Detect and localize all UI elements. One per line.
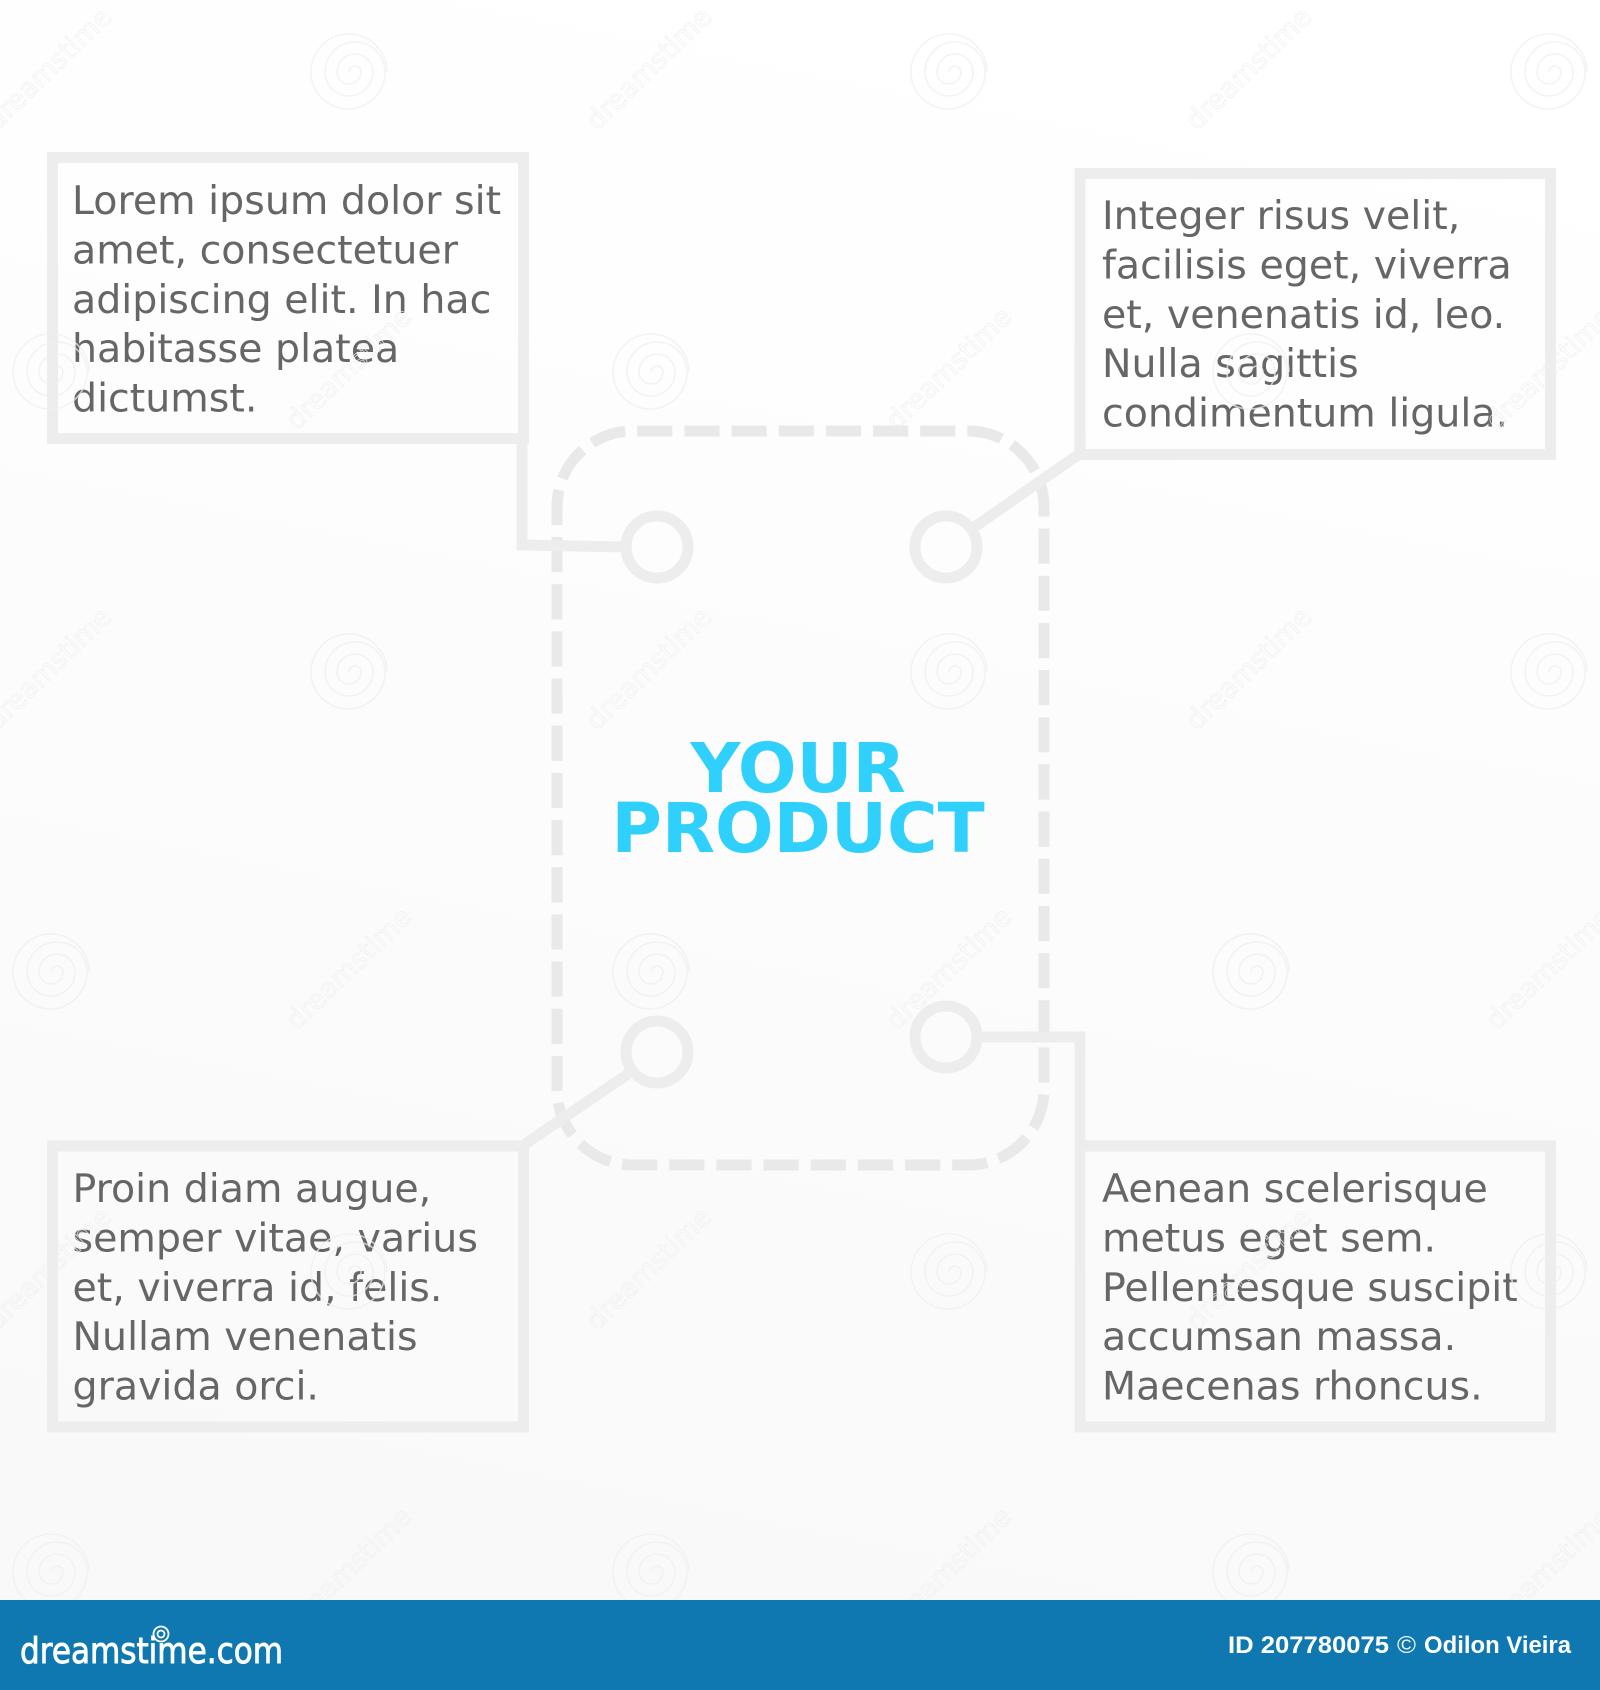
text: bottom right: Aenean scelerisque — [1102, 1166, 1488, 1212]
node: top left circle — [626, 516, 688, 578]
footer bar — [0, 1600, 1600, 1690]
connector: top right — [973, 455, 1078, 528]
text: bottom right: Pellentesque suscipit — [1102, 1265, 1518, 1311]
panel: bottom left text box — [52, 1146, 524, 1427]
node: top right circle — [915, 516, 977, 578]
watermark pattern: dreamstime — [880, 901, 1018, 1036]
watermark pattern: dreamstime — [1180, 601, 1318, 736]
connector: bottom left — [525, 1074, 628, 1144]
text: bottom right: metus eget sem. — [1102, 1215, 1436, 1261]
text: top right: Integer risus velit, — [1102, 193, 1460, 239]
text: top left: Lorem ipsum dolor sit — [72, 178, 501, 224]
panel: bottom right text box — [1080, 1146, 1550, 1427]
title: your product: PRODUCT — [611, 789, 985, 869]
text: bottom left: Nullam venenatis — [72, 1314, 418, 1360]
watermark pattern: dreamstime — [280, 1501, 418, 1636]
footer image id and credit: Odilon Vieira — [1424, 1632, 1571, 1659]
text: top right: et, venenatis id, leo. — [1102, 292, 1505, 338]
watermark pattern: dreamstime — [580, 601, 718, 736]
connector: top left — [522, 443, 626, 547]
footer logo text: dreamstime.com — [20, 1631, 283, 1672]
watermark pattern: dreamstime — [880, 1501, 1018, 1636]
text: top left: habitasse platea — [72, 326, 399, 372]
text: bottom left: semper vitae, varius — [72, 1215, 478, 1261]
text: bottom left: gravida orci. — [72, 1364, 319, 1410]
watermark pattern: dreamstime — [1180, 1201, 1318, 1336]
text: top left: adipiscing elit. In hac — [72, 277, 491, 323]
text: bottom left: et, viverra id, felis. — [72, 1265, 442, 1311]
text: top right: Nulla sagittis — [1102, 341, 1359, 387]
node: bottom right circle — [915, 1006, 977, 1068]
panel: top right text box — [1080, 174, 1550, 454]
watermark pattern: dreamstime — [280, 901, 418, 1036]
text: top left: amet, consectetuer — [72, 227, 459, 273]
dashed product outline — [557, 431, 1044, 1165]
node: bottom left circle — [626, 1021, 688, 1083]
text: top right: condimentum ligula. — [1102, 391, 1508, 437]
connector: bottom right — [981, 1037, 1080, 1141]
footer image id and credit: ID 207780075 — [1228, 1632, 1389, 1659]
panel: top left text box — [52, 158, 524, 438]
text: top right: facilisis eget, viverra — [1102, 242, 1512, 288]
text: bottom left: Proin diam augue, — [72, 1166, 431, 1212]
text: top left: dictumst. — [72, 376, 257, 422]
text: bottom right: Maecenas rhoncus. — [1102, 1364, 1483, 1410]
watermark pattern: dreamstime — [880, 301, 1018, 436]
footer image id and credit — [1228, 1632, 1571, 1659]
watermark pattern: dreamstime — [1180, 1, 1318, 136]
title: your product: YOUR — [689, 729, 906, 809]
text: bottom right: accumsan massa. — [1102, 1314, 1456, 1360]
watermark pattern: dreamstime — [580, 1, 718, 136]
watermark pattern: dreamstime — [280, 301, 418, 436]
icon: logo spiral — [154, 1626, 168, 1642]
watermark pattern: dreamstime — [580, 1201, 718, 1336]
footer image id and credit: © — [1397, 1632, 1416, 1659]
